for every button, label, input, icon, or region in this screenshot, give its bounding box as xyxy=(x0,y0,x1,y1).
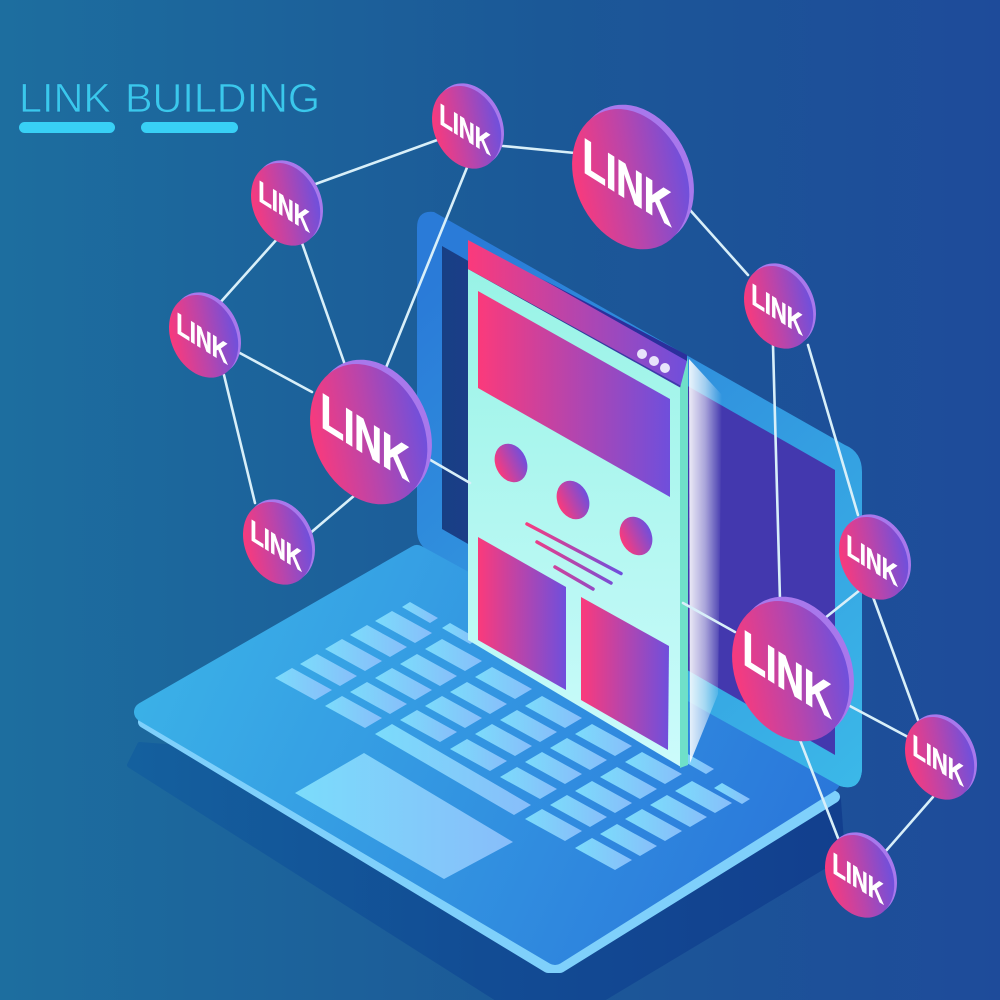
page green edge xyxy=(680,357,688,768)
glass fold xyxy=(689,359,722,763)
link node: right xyxy=(826,503,924,611)
laptop base xyxy=(144,555,830,955)
laptop base edge xyxy=(144,555,834,967)
link node: large top: LINK xyxy=(583,126,671,237)
link node: upper left: LINK xyxy=(258,174,310,239)
page body xyxy=(468,269,681,767)
link node: bottom right: LINK xyxy=(832,846,884,911)
link node: large right: LINK xyxy=(743,618,831,729)
link node: top center small: LINK xyxy=(439,97,491,162)
link node: far right xyxy=(892,703,990,811)
menu dots xyxy=(637,349,670,373)
laptop shadow xyxy=(130,745,842,1000)
hero image xyxy=(478,291,670,497)
bottom right image xyxy=(581,597,669,750)
link node: large left: LINK xyxy=(321,381,409,492)
link node: top center small xyxy=(419,72,517,180)
title: link building xyxy=(19,75,320,133)
text lines xyxy=(527,524,621,589)
laptop xyxy=(130,212,862,1000)
link node: left: LINK xyxy=(176,306,228,371)
link node: far right: LINK xyxy=(912,728,964,793)
link node: bottom right xyxy=(812,821,910,929)
laptop lid lower rim xyxy=(468,542,862,787)
laptop screen xyxy=(442,246,835,755)
keyboard xyxy=(275,602,750,870)
bottom left image xyxy=(478,537,566,690)
trackpad xyxy=(295,753,513,879)
page header bar xyxy=(468,240,687,388)
link node: upper right xyxy=(731,252,829,360)
laptop lid xyxy=(417,212,862,787)
link node: upper left xyxy=(238,149,336,257)
link node: lower left xyxy=(230,488,328,596)
link node: upper right: LINK xyxy=(751,277,803,342)
three circles xyxy=(488,438,659,561)
link node: large top xyxy=(550,85,716,269)
web page panel xyxy=(468,240,722,768)
title: link building: BUILDING xyxy=(125,75,320,121)
network connection lines xyxy=(218,139,933,852)
link node: left xyxy=(156,281,254,389)
page top shadow xyxy=(540,278,687,361)
link node: right: LINK xyxy=(846,528,898,593)
title: link building: LINK xyxy=(19,75,111,121)
link node: large right xyxy=(710,577,876,761)
link node: lower left: LINK xyxy=(250,513,302,578)
link node: large left xyxy=(288,340,454,524)
